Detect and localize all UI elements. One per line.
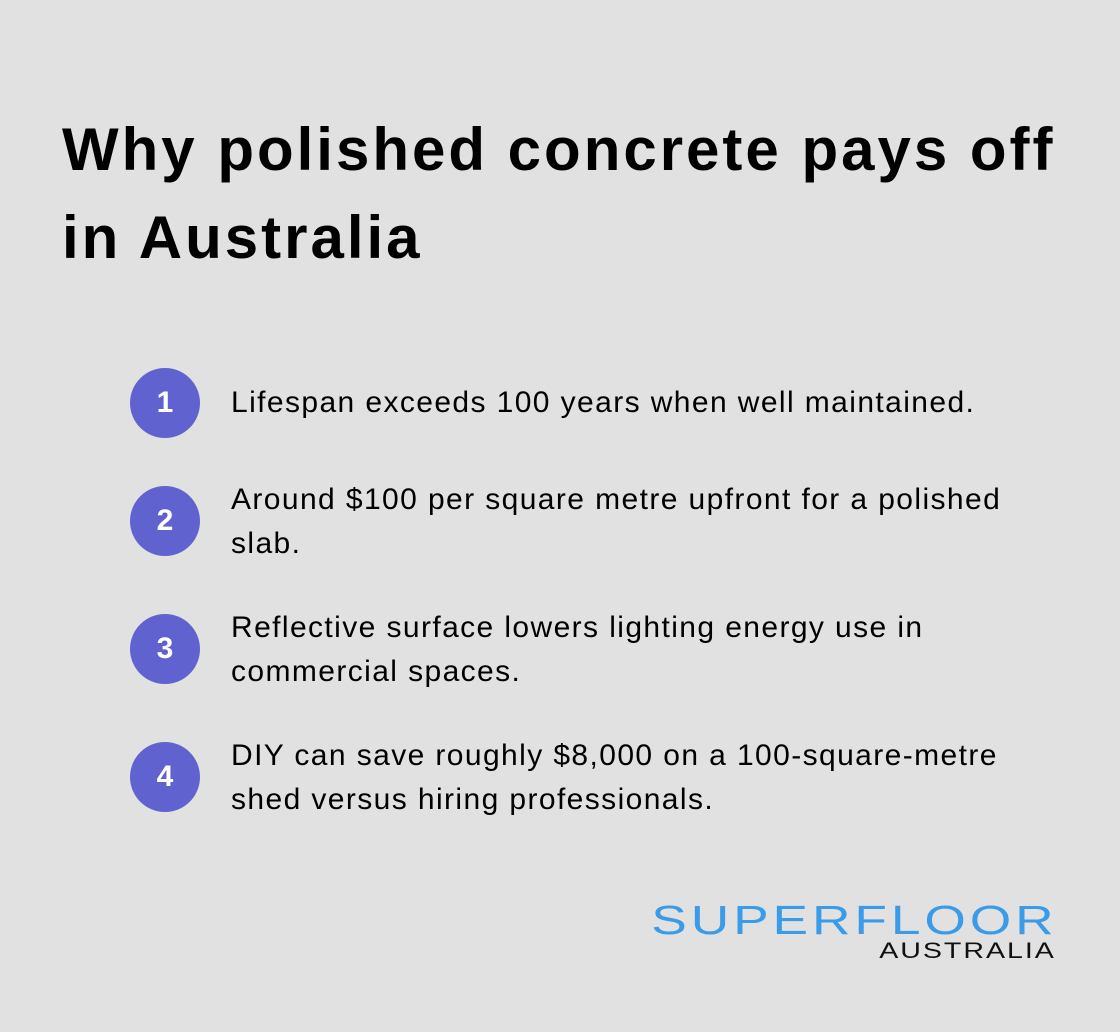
icon: number 3 [130, 614, 200, 684]
text 1: Lifespan exceeds 100 years when well maintained. [231, 386, 975, 419]
item 2 [130, 483, 1001, 560]
icon: number 4: 4 [157, 760, 173, 793]
item 1 [130, 368, 975, 438]
icon: number 4 [130, 742, 200, 812]
text 4: DIY can save roughly $8,000 on a 100-square-metre shed versus hiring professionals. [231, 739, 998, 816]
title: in Australia [62, 204, 423, 271]
text 3: Reflective surface lowers lighting energy use in commercial spaces. [231, 611, 924, 688]
text 2: Around $100 per square metre upfront for a polished slab. [231, 483, 1001, 560]
icon: number 2: 2 [157, 504, 173, 537]
item 4 [130, 739, 998, 816]
logo [651, 897, 1057, 963]
title [62, 116, 1056, 271]
icon: number 2 [130, 486, 200, 556]
logo: AUSTRALIA [879, 938, 1056, 963]
icon: number 1 [130, 368, 200, 438]
logo: SUPERFLOOR [651, 897, 1057, 943]
title: Why polished concrete pays off [62, 116, 1056, 183]
icon: number 1: 1 [157, 386, 173, 419]
item 3 [130, 611, 924, 688]
icon: number 3: 3 [157, 632, 173, 665]
